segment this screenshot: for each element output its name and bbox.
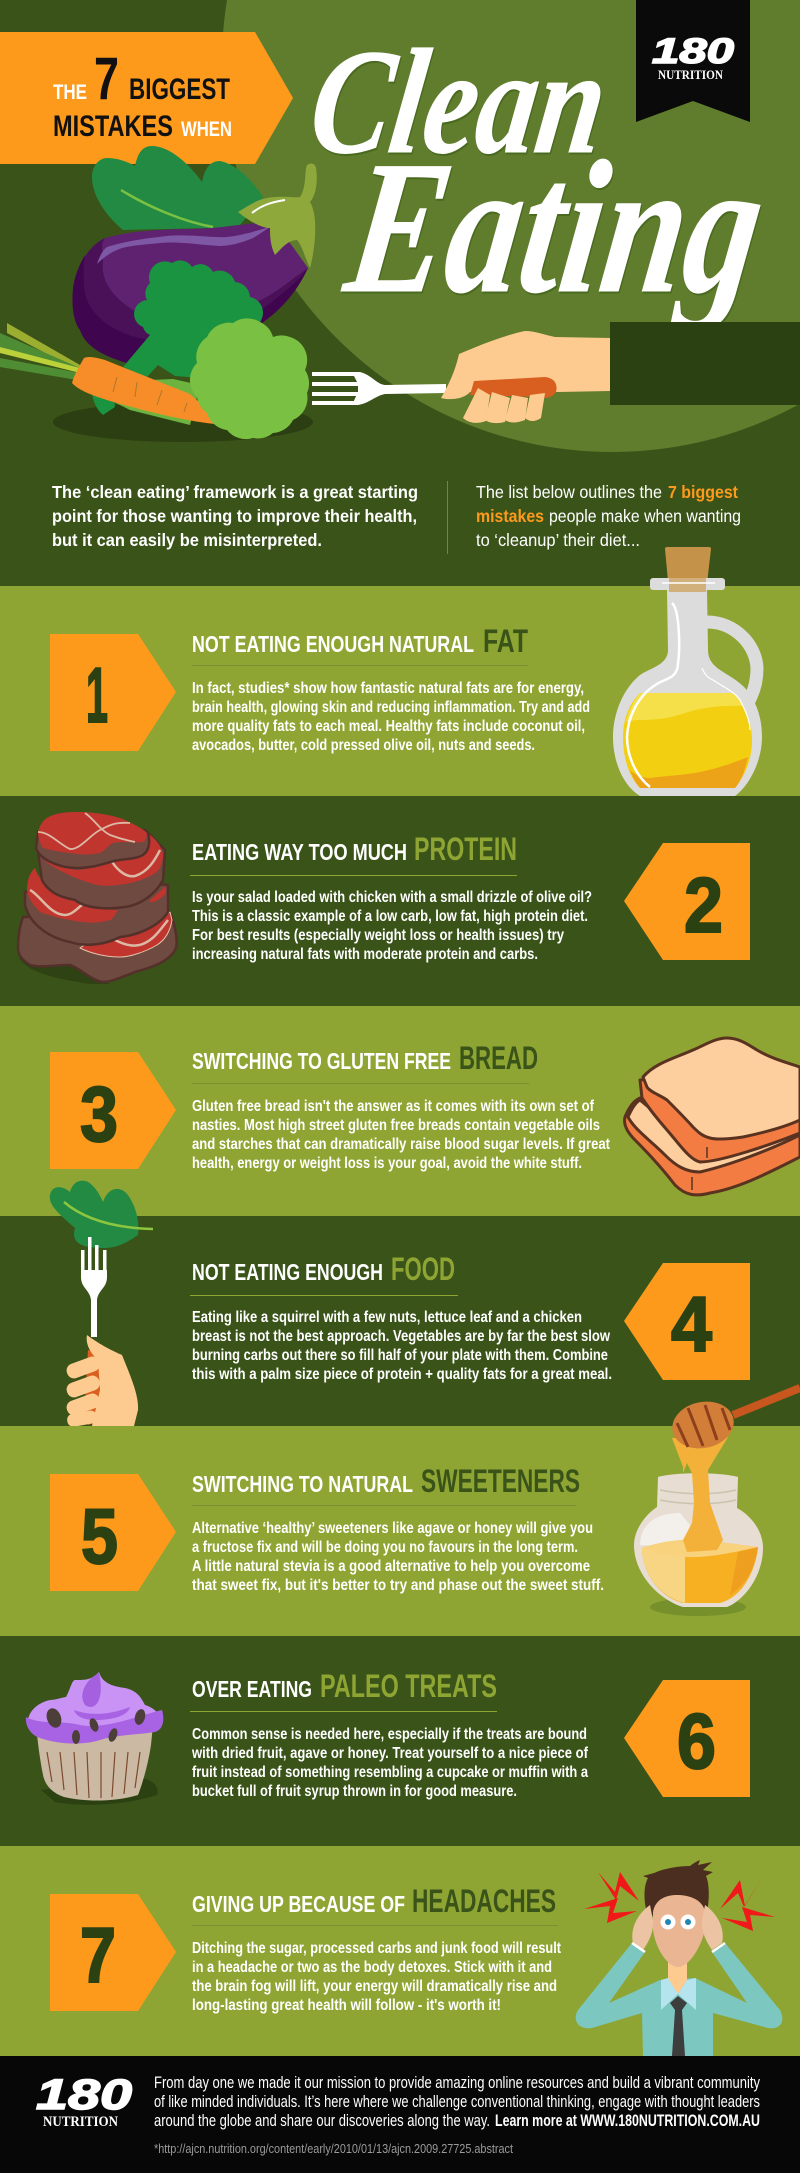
footer text: around the globe and share our discoveries along the way. [154, 2112, 490, 2130]
highlights [627, 603, 679, 787]
intro right text: The list below outlines the [476, 482, 662, 502]
number 4: 4 [671, 1280, 712, 1368]
number 4 [624, 1263, 750, 1380]
heading 3: SWITCHING TO GLUTEN FREE [192, 1048, 451, 1074]
eyes [660, 1914, 696, 1930]
logo ribbon: NUTRITION [658, 68, 723, 82]
body 3: Gluten free bread isn't the answer as it comes with its own set of [192, 1098, 595, 1115]
illustration: vegetables [0, 146, 317, 442]
body 2: increasing natural fats with moderate protein and carbs. [192, 946, 538, 963]
body 7 [192, 1940, 561, 2014]
heading 2: EATING WAY TOO MUCH [192, 839, 407, 865]
body 2: For best results (especially weight loss or health issues) try [192, 927, 564, 944]
body 5: that sweet fix, but it's better to try and phase out the sweet stuff. [192, 1577, 604, 1594]
body 4: Eating like a squirrel with a few nuts, lettuce leaf and a chicken [192, 1309, 582, 1326]
lower slice [625, 1098, 800, 1195]
panel: mistake 2 [0, 796, 800, 1006]
vegetable shadow [53, 402, 313, 442]
body 6: Common sense is needed here, especially if the treats are bound [192, 1726, 587, 1743]
frosting [28, 1672, 162, 1729]
fork [81, 1237, 107, 1337]
number 7: 7 [80, 1911, 116, 1999]
fingers [463, 388, 545, 423]
banner: the 7 biggest mistakes when: BIGGEST [129, 73, 230, 106]
panel: hero [0, 0, 800, 586]
icon: cupcake [26, 1672, 163, 1805]
body 1: more quality fats to each meal. Healthy fats include coconut oil, [192, 718, 585, 735]
number 6 [624, 1680, 750, 1797]
tie [670, 1996, 687, 2056]
icon: honey dipper [668, 1388, 800, 1552]
body 4 [192, 1309, 612, 1383]
leaf on fork [50, 1181, 153, 1248]
heading 3 [192, 1040, 538, 1084]
heading 6 [190, 1668, 497, 1712]
icon: stacked steaks [18, 812, 177, 984]
bottle body [613, 590, 762, 796]
collar [661, 1978, 696, 2010]
heading 3: BREAD [459, 1040, 538, 1076]
handle [707, 622, 757, 705]
illustration: hand with fork [312, 331, 610, 423]
neck [668, 1960, 687, 1994]
body 5: a fructose fix and will be doing you no favours in the long term. [192, 1539, 578, 1556]
banner: the 7 biggest mistakes when: 7 [94, 45, 119, 112]
heading 5: SWEETENERS [421, 1463, 580, 1499]
panel: mistake 4 [0, 1181, 800, 1428]
footnote: *http://ajcn.nutrition.org/content/early/2010/01/13/ajcn.2009.27725.abstract [154, 2141, 513, 2156]
panel: mistake 7 [0, 1846, 800, 2056]
logo ribbon: 180 [652, 32, 735, 71]
body 7: Ditching the sugar, processed carbs and junk food will result [192, 1940, 561, 1957]
heading 4: FOOD [391, 1251, 455, 1287]
handle [85, 1350, 103, 1425]
heading 6: OVER EATING [192, 1676, 312, 1702]
icon: bread slices [625, 1038, 800, 1195]
icon: honey jar [634, 1473, 763, 1616]
face [653, 1895, 705, 1967]
cuffs [632, 1943, 725, 1952]
heading 5: SWITCHING TO NATURAL [192, 1471, 413, 1497]
footer logo: 180 [36, 2071, 132, 2119]
upper slice [640, 1038, 800, 1162]
intro left text: The ‘clean eating’ framework is a great starting [52, 482, 418, 502]
leaf behind eggplant [92, 146, 263, 230]
icon: man with headache [576, 1860, 782, 2056]
panel: mistake 3 [0, 1006, 800, 1216]
heading 7: HEADACHES [412, 1883, 556, 1919]
panel: footer [0, 2056, 800, 2173]
body 5 [192, 1520, 604, 1594]
body 3: and starches that can dramatically raise blood sugar levels. If great [192, 1136, 610, 1153]
banner: the 7 biggest mistakes when [0, 32, 293, 164]
steak 2 [38, 830, 165, 908]
body 7: long-lasting great health will follow - it's worth it! [192, 1997, 501, 2014]
footer logo [36, 2071, 132, 2130]
body 6: with dried fruit, agave or honey. Treat yourself to a nice piece of [191, 1745, 589, 1762]
body 3: health, energy or weight loss is your goal, avoid the white stuff. [192, 1155, 582, 1172]
body 6: bucket full of fruit syrup thrown in for good measure. [192, 1783, 517, 1800]
body 5: Alternative ‘healthy’ sweeteners like agave or honey will give you [192, 1520, 593, 1537]
hands [632, 1905, 723, 1950]
heading 6: PALEO TREATS [320, 1668, 497, 1704]
body 1 [192, 680, 590, 754]
body 7: in a headache or two as the body detoxes. Stick with it and [192, 1959, 552, 1976]
banner: the 7 biggest mistakes when: MISTAKES [53, 110, 173, 143]
shirt [576, 1943, 782, 2056]
heading 1: FAT [483, 623, 528, 659]
sleeve [610, 322, 800, 405]
intro right text: to ‘cleanup’ their diet... [476, 530, 640, 550]
red zaps [584, 1872, 775, 1931]
intro right text: mistakes [476, 506, 544, 526]
number 3 [50, 1052, 176, 1169]
body 5: A little natural stevia is a good alternative to help you overcome [192, 1558, 590, 1575]
wrapper [36, 1725, 153, 1801]
intro right text: 7 biggest [668, 482, 738, 502]
number 1 [50, 634, 176, 751]
number 1: 1 [86, 651, 108, 739]
body 2: Is your salad loaded with chicken with a small drizzle of olive oil? [192, 889, 592, 906]
body 4: breast is not the best approach. Vegetables are by far the best slow [192, 1328, 611, 1345]
body 1: avocados, butter, cold pressed olive oil, nuts and seeds. [192, 737, 535, 754]
eggplant [73, 164, 317, 363]
heading 5 [192, 1463, 580, 1506]
number 5 [50, 1474, 176, 1591]
body 4: this with a palm size piece of protein + quality fats for a great meal. [192, 1366, 612, 1383]
body 3 [192, 1098, 610, 1172]
steak 4 [18, 912, 177, 982]
heading 2: PROTEIN [414, 831, 517, 867]
heading 7: GIVING UP BECAUSE OF [192, 1891, 405, 1917]
title: clean eating: Clean [301, 19, 617, 185]
intro right text: people make when wanting [549, 506, 741, 526]
icon: oil bottle [613, 547, 762, 796]
body 6: fruit instead of something resembling a cupcake or muffin with a [192, 1764, 588, 1781]
body 3: nasties. Most high street gluten free breads contain vegetable oils [192, 1117, 600, 1134]
heading 2 [190, 831, 517, 876]
cork [665, 547, 711, 592]
fork [312, 372, 446, 405]
body 4: burning carbs out there so fill half of your plate with them. Combine [192, 1347, 608, 1364]
panel: mistake 5 [0, 1426, 800, 1636]
number 6: 6 [677, 1697, 716, 1785]
broccoli light [190, 318, 309, 439]
icon: fork with leaf and hand [50, 1181, 153, 1428]
banner: the 7 biggest mistakes when: THE [53, 81, 87, 104]
body 1: In fact, studies* show how fantastic natural fats are for energy, [192, 680, 584, 697]
oil [623, 693, 752, 788]
heading 7 [192, 1883, 558, 1926]
title: clean eating [301, 19, 776, 333]
body 2: This is a classic example of a low carb, low fat, high protein diet. [192, 908, 588, 925]
intro left text: but it can easily be misinterpreted. [52, 530, 322, 550]
dipper head [668, 1396, 738, 1454]
number 3: 3 [80, 1070, 118, 1158]
body 7: the brain fog will lift, your energy will dramatically rise and [192, 1978, 557, 1995]
stick [733, 1388, 800, 1415]
number 2: 2 [684, 861, 723, 949]
footer logo: NUTRITION [43, 2114, 118, 2130]
panel: mistake 1 [0, 547, 800, 796]
broccoli dark [92, 260, 263, 425]
heading 1: NOT EATING ENOUGH NATURAL [192, 631, 474, 657]
intro left text: point for those wanting to improve their health, [52, 506, 417, 526]
banner: the 7 biggest mistakes when: WHEN [181, 118, 232, 141]
hair [643, 1860, 713, 1925]
heading 1 [192, 623, 528, 666]
carrot [0, 323, 225, 425]
number 2 [624, 843, 750, 960]
steak 1 [36, 812, 149, 868]
intro left text [52, 482, 418, 550]
footer text [154, 2074, 761, 2130]
intro right text [476, 482, 741, 550]
cupcake shadow [41, 1778, 158, 1805]
fork handle [470, 377, 557, 398]
number 7 [50, 1894, 176, 2011]
body 1: brain health, glowing skin and reducing inflammation. Try and add [192, 699, 590, 716]
palm [441, 331, 610, 399]
hand [65, 1335, 138, 1428]
body 6 [191, 1726, 589, 1800]
steak 3 [25, 868, 168, 945]
hero background circle [222, 0, 800, 452]
lip [650, 578, 725, 590]
number 5: 5 [81, 1492, 118, 1580]
logo ribbon [636, 0, 750, 122]
honey drip [672, 1437, 728, 1552]
heading 4 [190, 1251, 458, 1296]
panel: mistake 6 [0, 1636, 800, 1846]
body 2 [192, 889, 592, 963]
steak shadow [18, 953, 110, 984]
heading 4: NOT EATING ENOUGH [192, 1259, 383, 1285]
